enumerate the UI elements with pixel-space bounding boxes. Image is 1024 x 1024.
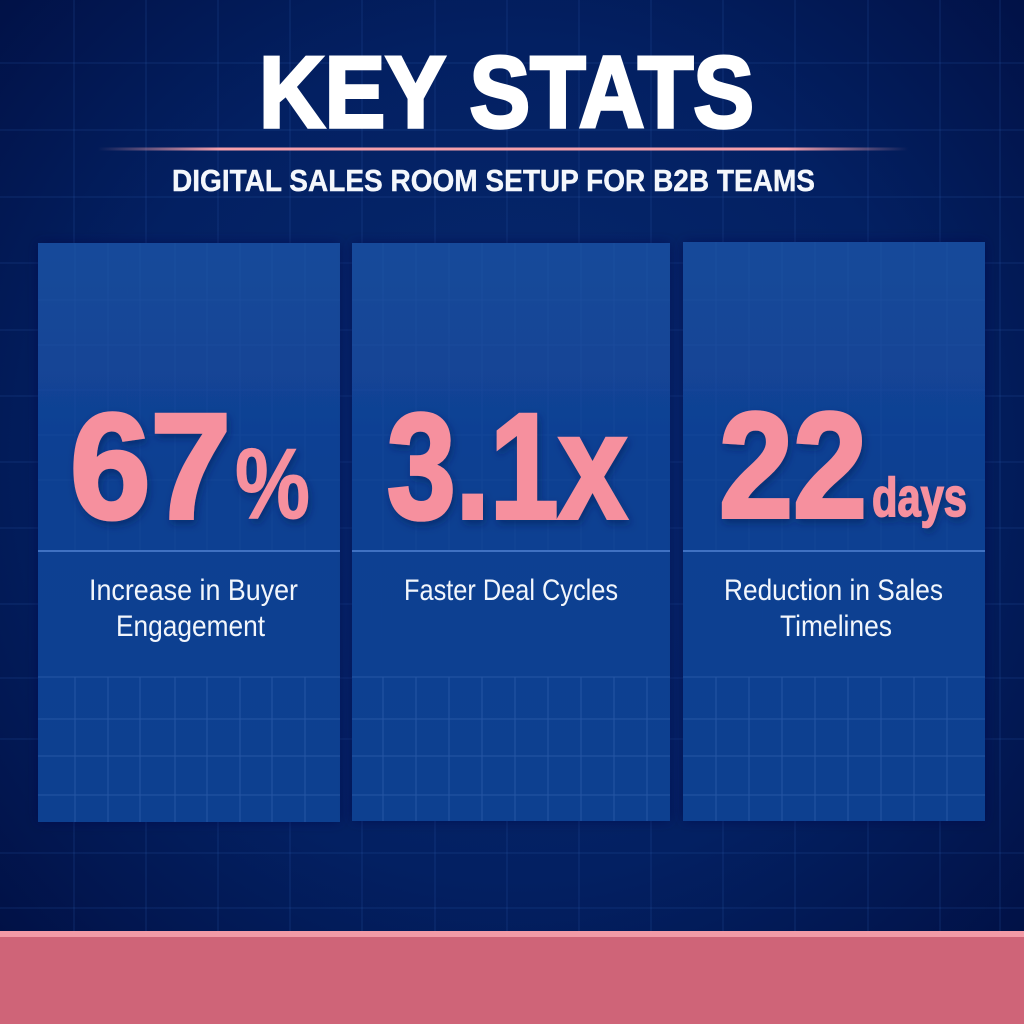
stat: 22 days: 22	[719, 381, 867, 549]
title: KEY STATS	[259, 37, 754, 149]
label	[89, 574, 298, 643]
stat: 67%	[70, 382, 310, 550]
label: Timelines	[780, 610, 892, 643]
title rule	[98, 148, 908, 150]
label: Increase in Buyer	[89, 574, 298, 607]
stat: 22 days: days	[872, 466, 967, 528]
label: Faster Deal Cycles	[404, 574, 618, 607]
stat: 3.1x: 3.1x	[387, 382, 627, 550]
stat: 67%: %	[235, 428, 310, 540]
label	[724, 574, 943, 643]
divider	[352, 550, 670, 552]
stat: 67%: 67	[70, 382, 231, 550]
panel: buyer engagement	[38, 243, 340, 822]
divider	[683, 550, 985, 552]
panel: sales timelines	[683, 242, 985, 821]
panel: deal cycles	[352, 243, 670, 821]
stat: 22 days	[719, 381, 967, 549]
label: Reduction in Sales	[724, 574, 943, 607]
label: Engagement	[116, 610, 266, 643]
subtitle: DIGITAL SALES ROOM SETUP FOR B2B TEAMS	[172, 163, 815, 198]
divider	[38, 550, 340, 552]
footer band	[0, 931, 1024, 1024]
